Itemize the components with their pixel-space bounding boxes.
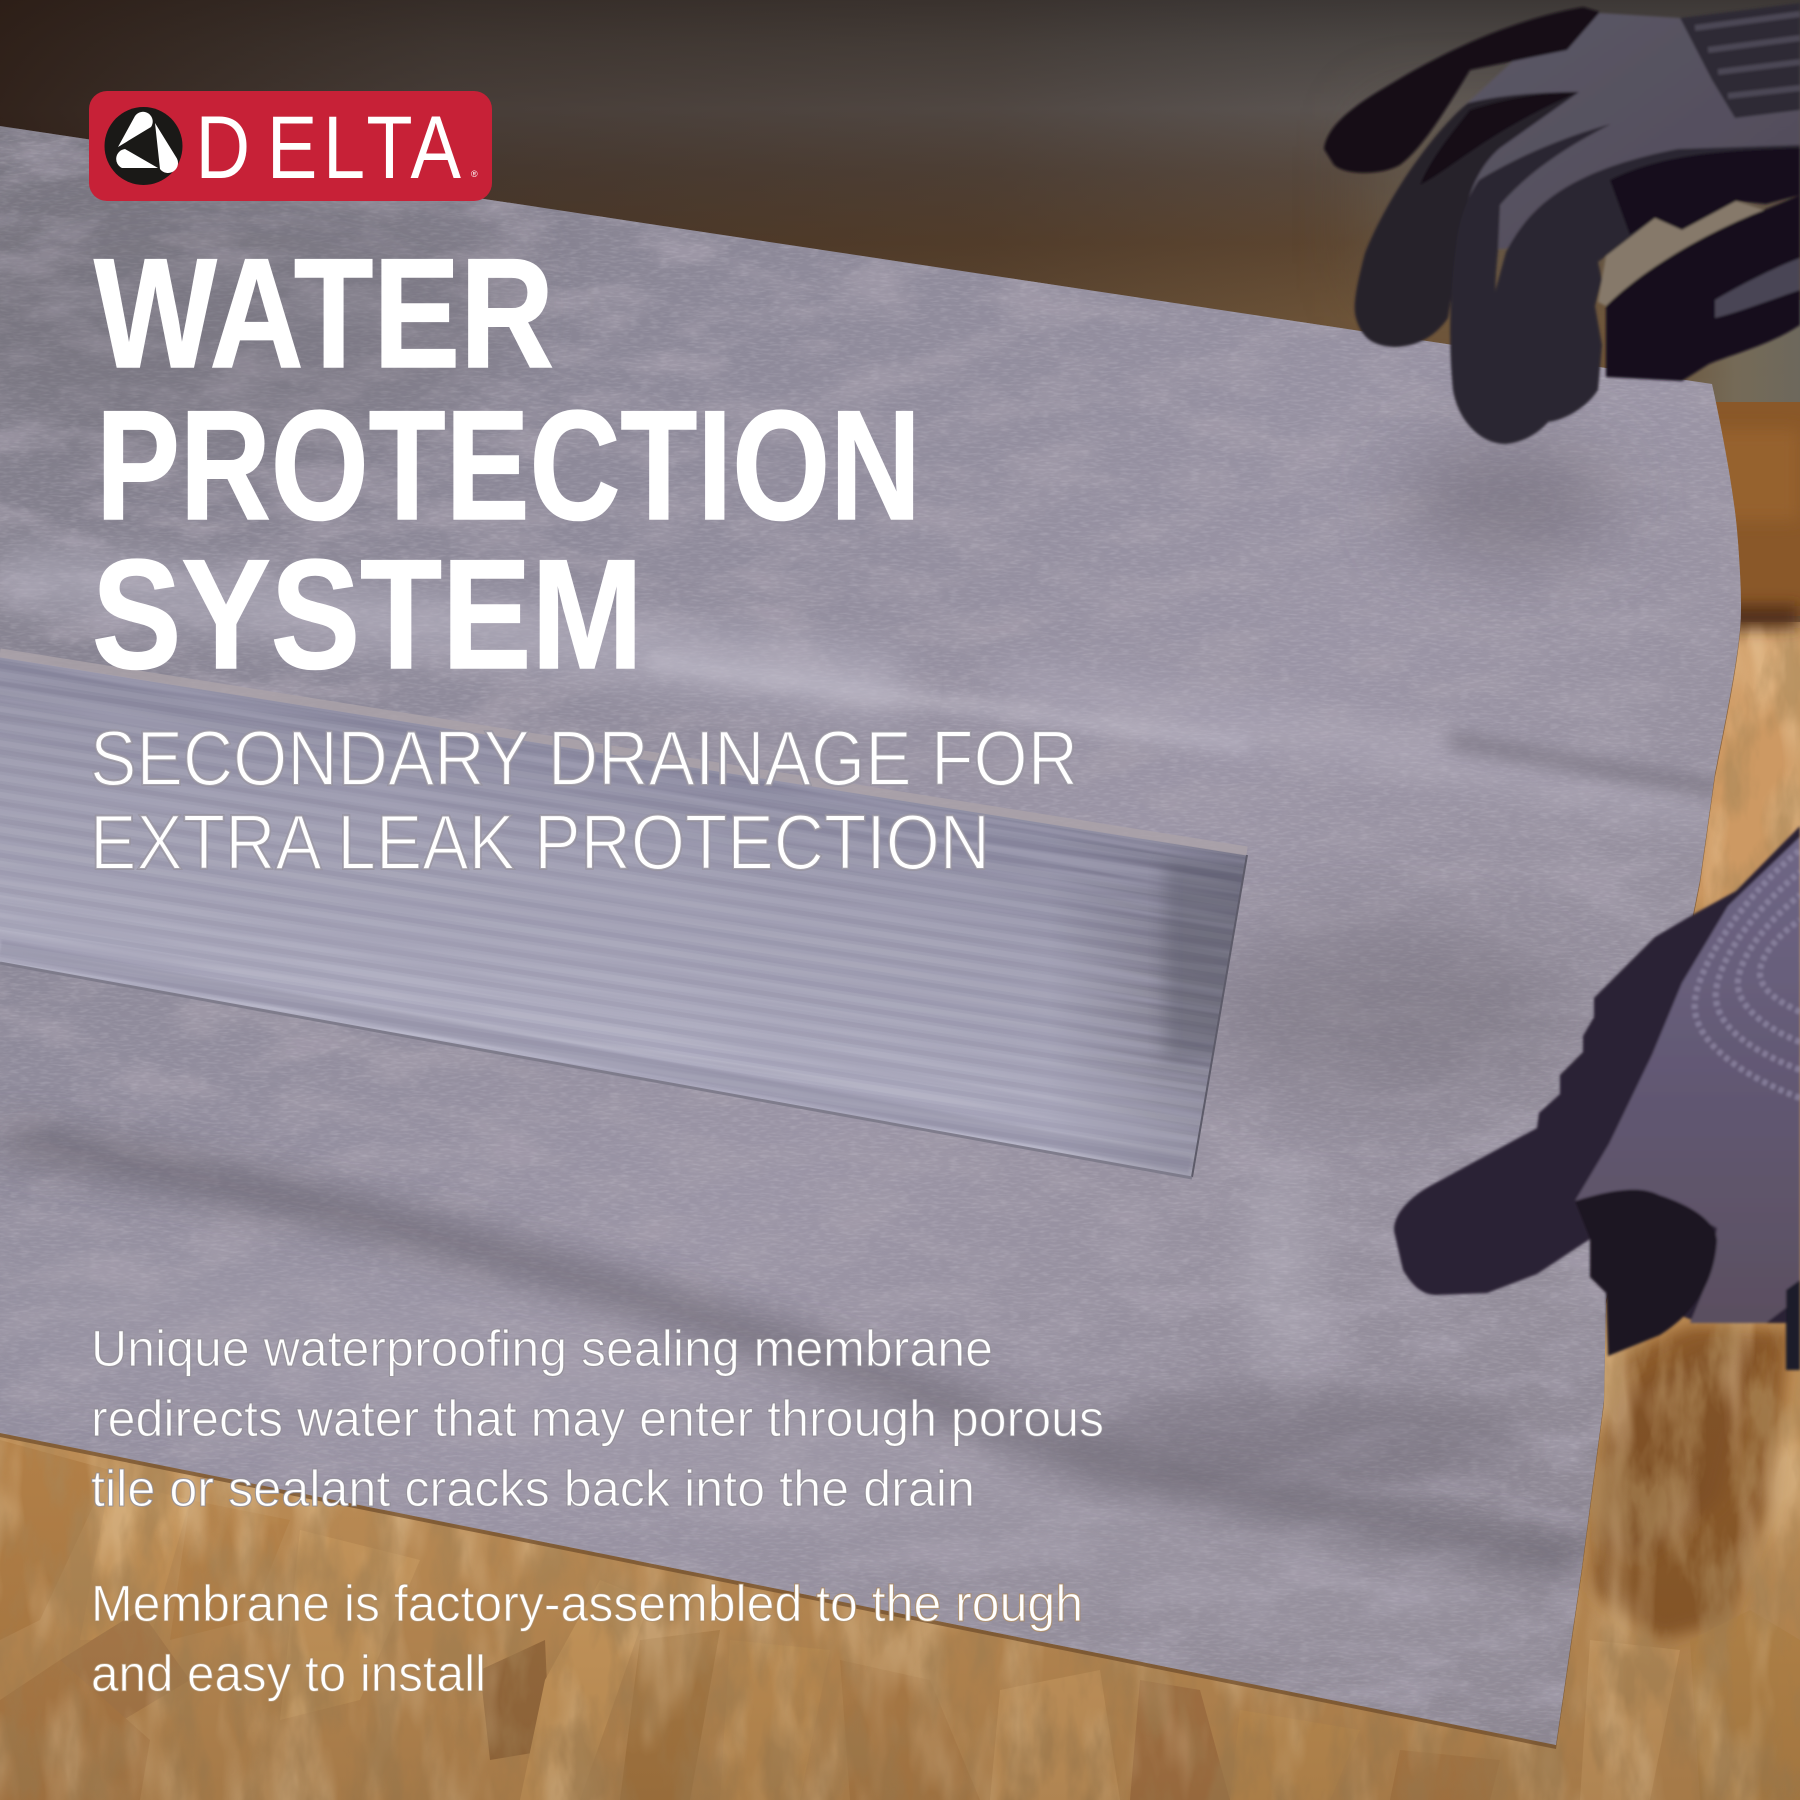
subtitle: secondary drainage: SECONDARY DRAINAGE FOR xyxy=(90,714,1078,802)
background: blurred wall xyxy=(0,0,1800,640)
title: Water Protection System: PROTECTION xyxy=(96,379,921,553)
text block: membrane redirects water: redirects water that may enter through porous xyxy=(91,1390,1104,1447)
logo: Delta badge xyxy=(89,91,492,201)
title: Water Protection System xyxy=(92,227,921,702)
text block: membrane redirects water: Unique waterproofing sealing membrane xyxy=(91,1320,993,1377)
text block: factory assembled xyxy=(91,1575,1083,1702)
subtitle: secondary drainage xyxy=(90,714,1078,886)
text block: membrane redirects water: tile or sealant cracks back into the drain xyxy=(91,1460,975,1517)
text block: membrane redirects water xyxy=(91,1320,1104,1517)
text block: factory assembled: Membrane is factory-assembled to the rough xyxy=(91,1575,1083,1632)
registered mark: ® xyxy=(471,169,478,179)
text block: factory assembled: and easy to install xyxy=(91,1645,486,1702)
panel: clear drain channel xyxy=(0,648,1248,1180)
subtitle: secondary drainage: EXTRA LEAK PROTECTION xyxy=(90,798,990,886)
title: Water Protection System: SYSTEM xyxy=(92,528,643,702)
wordmark: DELTA: DELTA xyxy=(196,97,461,197)
icon: upper gloved hand xyxy=(1324,3,1800,444)
icon: Delta triangle mark xyxy=(104,107,182,185)
title: Water Protection System: WATER xyxy=(94,227,554,401)
background: oriented strand board floor xyxy=(0,606,1800,1800)
icon: lower gloved hand xyxy=(1394,826,1800,1370)
background: orange wood plank on right xyxy=(1690,402,1800,616)
